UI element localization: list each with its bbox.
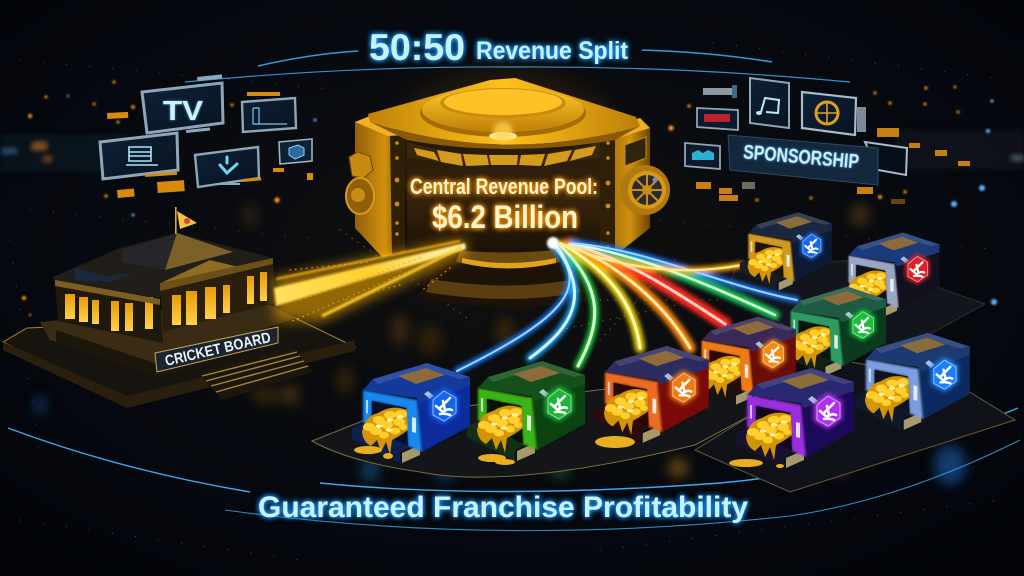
spilled coins (354, 436, 784, 468)
flag (175, 207, 197, 234)
screen: cyan wave (685, 143, 720, 169)
panel: sponsorship screens (685, 78, 970, 204)
cricket board building (3, 207, 355, 408)
sponsorship tags (696, 85, 970, 204)
franchise box: gold and blue back (740, 212, 832, 290)
floor reflections (35, 203, 966, 485)
franchise box: green (467, 361, 585, 461)
platform: franchise row back (730, 260, 985, 348)
franchise box: red (594, 346, 709, 443)
roof (53, 233, 273, 298)
panel trim (407, 139, 600, 166)
bokeh lights (22, 80, 997, 316)
platform: franchise row front (312, 375, 770, 477)
pediment (160, 260, 243, 290)
center glow (385, 70, 625, 230)
title: 50:50 Revenue Split: Revenue Split (476, 37, 629, 65)
title: 50:50 Revenue Split: 50:50 (369, 27, 465, 68)
panel: TV media screens (100, 74, 313, 198)
right wheel (620, 165, 670, 215)
left pillar (355, 116, 405, 257)
screen: box icon (279, 139, 312, 164)
vault text: $6.2 Billion (432, 199, 578, 235)
screen: blank (865, 142, 907, 175)
vault text (410, 174, 598, 235)
banner: sponsorship: SPONSORSHIP (742, 141, 860, 173)
top lid (368, 78, 640, 149)
blurred skyline left (0, 134, 130, 172)
franchise box: orange (692, 317, 796, 405)
screen: music note (750, 78, 789, 128)
screen: TV: TV (163, 95, 203, 126)
franchise box: blue right (855, 333, 970, 430)
base steps (420, 243, 592, 308)
screen: red logo (697, 108, 738, 130)
plinth (3, 317, 355, 403)
franchise box: red emblem back (839, 233, 940, 318)
left dials (346, 152, 374, 214)
screen: news (100, 133, 178, 179)
right wing (160, 263, 275, 332)
franchise box: purple (736, 368, 854, 468)
top arc lines (185, 50, 850, 82)
screen: gear emblem (802, 92, 866, 135)
rainbow revenue streams (457, 237, 797, 371)
screen: download (195, 147, 259, 187)
bottom caption: Guaranteed Franchise Profitability: Guaranteed Franchise Profitability (258, 491, 748, 524)
platform: franchise row right (695, 360, 1015, 492)
dark panel body (407, 140, 600, 252)
franchise box: blue (352, 363, 470, 463)
left wing (55, 283, 163, 343)
title: 50:50 Revenue Split (369, 27, 629, 68)
media tags (107, 92, 313, 198)
steps (197, 348, 313, 400)
screen: chart (242, 98, 296, 132)
banner: cricket board: CRICKET BOARD (163, 329, 273, 370)
gold beam to cricket board (273, 238, 468, 322)
right pillar (600, 118, 650, 258)
central revenue vault (346, 70, 670, 308)
blurred skyline right (895, 130, 1024, 170)
banner: sponsorship (728, 135, 878, 185)
vault text: Central Revenue Pool: (410, 174, 598, 199)
screen: TV (142, 74, 223, 133)
bottom arc lines (8, 408, 1020, 531)
franchise box: green back (781, 287, 886, 376)
